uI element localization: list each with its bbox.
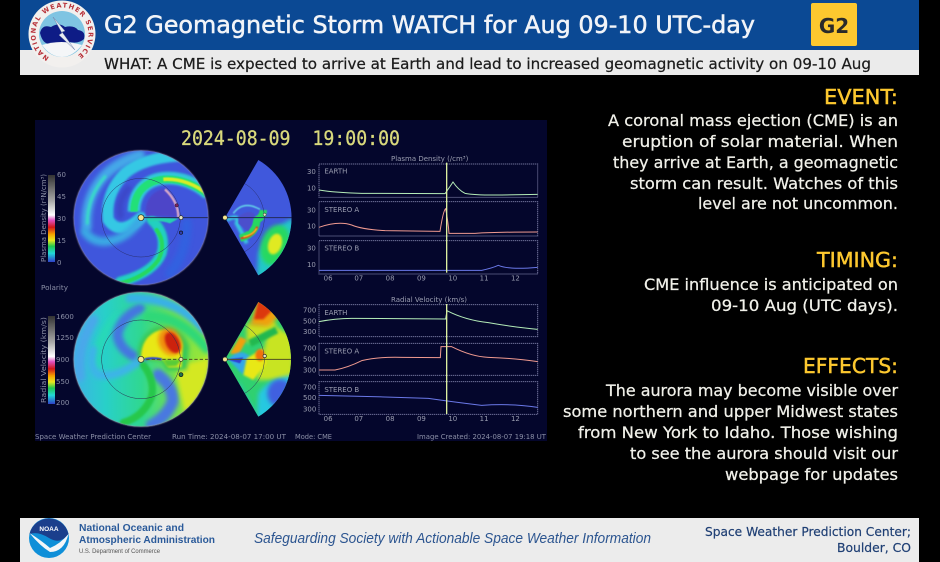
subtitle band	[20, 50, 919, 75]
chart: radial velocity time series: STEREO A	[324, 347, 359, 355]
chart: radial velocity time series: 07	[354, 415, 363, 423]
model footer credits: Image Created: 2024-08-07 19:18 UT	[417, 433, 547, 441]
text block: effects: EFFECTS:	[803, 354, 898, 378]
radial velocity colour bar: 200	[56, 399, 69, 407]
text block: timing: 09-10 Aug (UTC days).	[711, 296, 898, 315]
polarity label: Polarity	[41, 284, 68, 292]
plasma density colour bar: 45	[57, 193, 66, 201]
chart: plasma density time series: 07	[354, 275, 363, 283]
chart: radial velocity time series: EARTH	[324, 309, 347, 317]
text block: timing: TIMING:	[816, 248, 898, 272]
slogan: Safeguarding Society with Actionable Space Weather Information	[254, 531, 651, 547]
text block: event: eruption of solar material. When	[622, 132, 898, 151]
plasma density colour bar: 30	[57, 215, 66, 223]
what statement: WHAT: A CME is expected to arrive at Earth and lead to increased geomagnetic activity on 09-10 Aug	[104, 55, 871, 73]
text block: event: EVENT:	[824, 85, 898, 109]
chart: radial velocity time series: 08	[386, 415, 395, 423]
plasma density colour bar	[40, 171, 66, 267]
chart: plasma density time series: 09	[417, 275, 426, 283]
plasma density colour bar: 15	[57, 237, 66, 245]
chart: radial velocity polar map	[70, 288, 213, 432]
chart: plasma density polar map	[70, 147, 213, 287]
chart: plasma density time series: 12	[511, 275, 520, 283]
icon: G2 badge: G2	[819, 14, 849, 38]
NOAA name: Atmospheric Administration	[79, 534, 215, 546]
NOAA name: U.S. Department of Commerce	[79, 549, 161, 555]
footer band	[20, 518, 919, 562]
text block: event: storm can result. Watches of this	[630, 174, 898, 193]
arc: CME front	[134, 178, 208, 212]
chart: radial velocity time series: 500	[303, 394, 316, 402]
radial velocity colour bar: Radial Velocity (km/s)	[40, 317, 48, 403]
text block: event: they arrive at Earth, a geomagnetic	[613, 153, 898, 172]
panel: WSA-Enlil model image	[35, 120, 547, 441]
chart: radial velocity time series: 12	[511, 415, 520, 423]
chart: plasma density time series: 08	[386, 275, 395, 283]
icon: NOAA logo	[29, 518, 69, 558]
text block: timing: CME influence is anticipated on	[644, 275, 898, 294]
NOAA name: National Oceanic and	[79, 522, 184, 534]
chart: radial velocity wedge map	[222, 302, 291, 416]
radial velocity colour bar: 1600	[56, 313, 74, 321]
icon: NOAA logo: NOAA	[39, 526, 59, 533]
chart: plasma density time series: 10	[307, 184, 316, 192]
chart: plasma density time series: 11	[480, 275, 489, 283]
radial velocity colour bar: 550	[56, 378, 69, 386]
model footer credits: Space Weather Prediction Center	[35, 433, 151, 441]
chart: plasma density time series: 30	[307, 245, 316, 253]
chart: radial velocity time series: 10	[448, 415, 457, 423]
chart: radial velocity time series	[303, 296, 538, 423]
chart: plasma density time series: STEREO B	[324, 245, 359, 253]
chart: radial velocity time series: Radial Velocity (km/s)	[391, 296, 467, 304]
icon: G2 badge	[811, 3, 857, 46]
text block: event	[608, 85, 898, 213]
chart: plasma density time series	[307, 155, 538, 283]
chart: plasma density time series: EARTH	[324, 167, 347, 175]
chart: radial velocity time series: STEREO B	[324, 386, 359, 394]
chart: plasma density time series: 10	[307, 223, 316, 231]
chart: plasma density time series: 10	[448, 275, 457, 283]
SWPC location	[705, 524, 911, 555]
plasma density colour bar: 60	[57, 171, 66, 179]
header banner	[20, 0, 919, 75]
text block: effects: to see the aurora should visit our	[630, 444, 898, 463]
radial velocity colour bar	[40, 313, 74, 407]
timestamp: 2024-08-09 19:00:00	[181, 127, 400, 150]
chart: plasma density time series: STEREO A	[324, 206, 359, 214]
chart: radial velocity time series: 06	[324, 415, 333, 423]
title: G2 Geomagnetic Storm WATCH for Aug 09-10 UTC-day	[104, 11, 755, 39]
chart: radial velocity time series: 500	[303, 317, 316, 325]
text block: effects: The aurora may become visible over	[605, 381, 898, 400]
chart: radial velocity time series: 700	[303, 345, 316, 353]
radial velocity colour bar: 1250	[56, 334, 74, 342]
NOAA name	[79, 522, 215, 555]
chart: plasma density time series: 30	[307, 206, 316, 214]
SWPC location: Space Weather Prediction Center;	[705, 524, 911, 539]
plasma density colour bar: Plasma Density (r²N/cm³)	[40, 174, 48, 262]
text block: effects: some northern and upper Midwest states	[563, 402, 898, 421]
chart: radial velocity time series: 500	[303, 355, 316, 363]
chart: plasma density time series: 10	[307, 261, 316, 269]
text block: effects: from New York to Idaho. Those wishing	[578, 423, 898, 442]
model footer credits: Mode: CME	[295, 433, 332, 441]
chart: plasma density time series: Plasma Density (/cm³)	[391, 155, 469, 163]
icon: National Weather Service logo: NATIONAL WEATHER SERVICE	[30, 2, 94, 61]
plasma density colour bar: 0	[57, 259, 61, 267]
chart: radial velocity time series: 11	[480, 415, 489, 423]
chart: plasma density time series: 06	[324, 275, 333, 283]
chart: radial velocity time series: 09	[417, 415, 426, 423]
chart: radial velocity time series: 300	[303, 367, 316, 375]
text block: effects: webpage for updates	[725, 465, 898, 484]
model footer credits	[35, 433, 547, 441]
chart: radial velocity time series: 300	[303, 328, 316, 336]
chart: plasma density wedge map	[222, 160, 292, 276]
text block: timing	[644, 248, 898, 315]
chart: radial velocity time series: 700	[303, 307, 316, 315]
chart: plasma density time series: 30	[307, 168, 316, 176]
SWPC location: Boulder, CO	[837, 540, 911, 555]
chart: radial velocity time series: 300	[303, 405, 316, 413]
chart: radial velocity time series: 700	[303, 383, 316, 391]
model footer credits: Run Time: 2024-08-07 17:00 UT	[172, 433, 287, 441]
text block: event: A coronal mass ejection (CME) is an	[608, 111, 898, 130]
radial velocity colour bar: 900	[56, 356, 69, 364]
text block: event: level are not uncommon.	[698, 194, 898, 213]
text block: effects	[563, 354, 898, 484]
